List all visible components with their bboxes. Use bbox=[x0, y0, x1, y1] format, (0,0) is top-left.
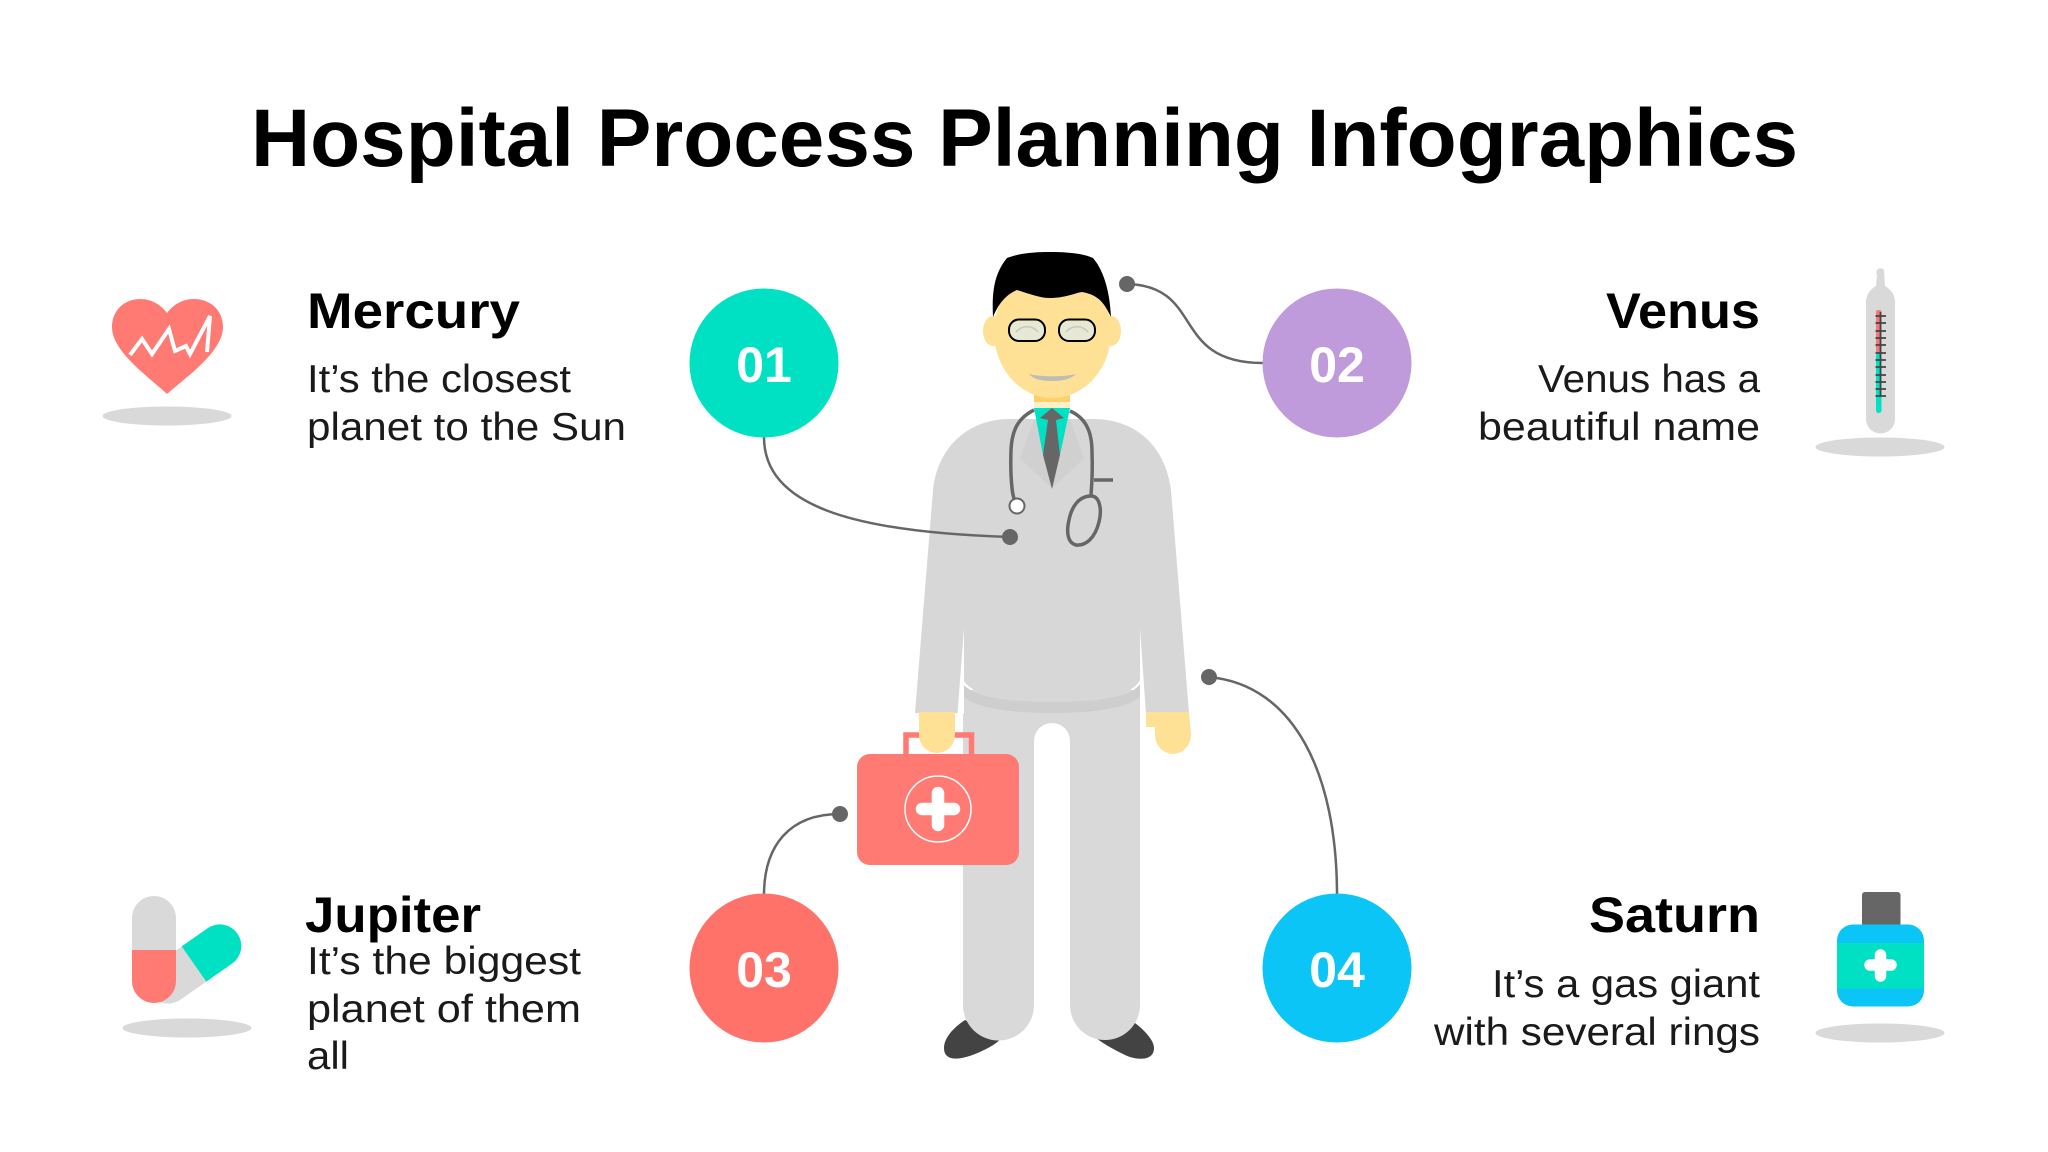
icon: right shoe bbox=[1096, 1023, 1154, 1059]
connector 04 bbox=[1201, 669, 1337, 895]
case body bbox=[857, 754, 1019, 865]
case emblem bbox=[905, 776, 971, 842]
text block: Venus bbox=[1478, 283, 1760, 449]
number badge 02: 02 bbox=[1309, 337, 1365, 393]
teal collar bbox=[1034, 408, 1070, 455]
text block: Jupiter: all bbox=[307, 1035, 349, 1078]
glasses bbox=[1009, 320, 1095, 341]
coat lapels bbox=[1020, 420, 1084, 488]
medical case bbox=[857, 712, 1019, 865]
number badge 02 bbox=[1262, 288, 1412, 438]
text block: Jupiter bbox=[305, 887, 581, 1078]
icon: left shoe bbox=[944, 1020, 1002, 1059]
text block: Saturn: It’s a gas giant bbox=[1492, 963, 1760, 1006]
text block: Saturn: Saturn bbox=[1589, 887, 1760, 943]
coat hem band bbox=[963, 684, 1140, 713]
icon: pills bbox=[122, 896, 252, 1038]
text block: Venus: Venus has a bbox=[1538, 358, 1760, 401]
icon: heart bbox=[102, 299, 232, 426]
case handle bbox=[906, 735, 972, 754]
text block: Venus: Venus bbox=[1606, 283, 1760, 339]
title: Hospital Process Planning Infographics bbox=[251, 93, 1798, 184]
mouth bbox=[1029, 374, 1076, 381]
icon: thermometer bbox=[1816, 268, 1944, 456]
neck bbox=[1034, 388, 1070, 404]
ears bbox=[983, 316, 1003, 346]
tie bbox=[1040, 408, 1064, 489]
hair bbox=[993, 252, 1111, 317]
number badge 01 bbox=[690, 288, 838, 438]
text block: Jupiter: Jupiter bbox=[305, 887, 481, 943]
coat bbox=[915, 419, 1189, 713]
connector 01 bbox=[764, 437, 1018, 545]
number badge 04 bbox=[1262, 894, 1412, 1042]
text block: Saturn bbox=[1433, 887, 1760, 1054]
text block: Saturn: with several rings bbox=[1433, 1011, 1760, 1054]
right hand bbox=[1146, 712, 1191, 754]
number badge 01: 01 bbox=[736, 337, 792, 393]
icon: bottle bbox=[1816, 892, 1944, 1042]
connector 03 bbox=[764, 806, 848, 895]
connector 02 bbox=[1119, 276, 1263, 363]
text block: Mercury: planet to the Sun bbox=[307, 406, 626, 449]
text block: Venus: beautiful name bbox=[1478, 406, 1760, 449]
text block: Jupiter: planet of them bbox=[307, 988, 581, 1031]
stethoscope bbox=[1010, 410, 1113, 545]
face bbox=[994, 266, 1111, 398]
doctor figure bbox=[915, 252, 1189, 1059]
text block: Mercury: Mercury bbox=[307, 283, 520, 339]
trousers bbox=[963, 690, 1140, 1040]
text block: Mercury bbox=[307, 283, 626, 449]
text block: Jupiter: It’s the biggest bbox=[307, 940, 581, 983]
left hand bbox=[919, 712, 955, 753]
number badge 03: 03 bbox=[736, 942, 792, 998]
text block: Mercury: It’s the closest bbox=[307, 358, 571, 401]
number badge 04: 04 bbox=[1309, 942, 1365, 998]
number badge 03 bbox=[690, 894, 838, 1042]
